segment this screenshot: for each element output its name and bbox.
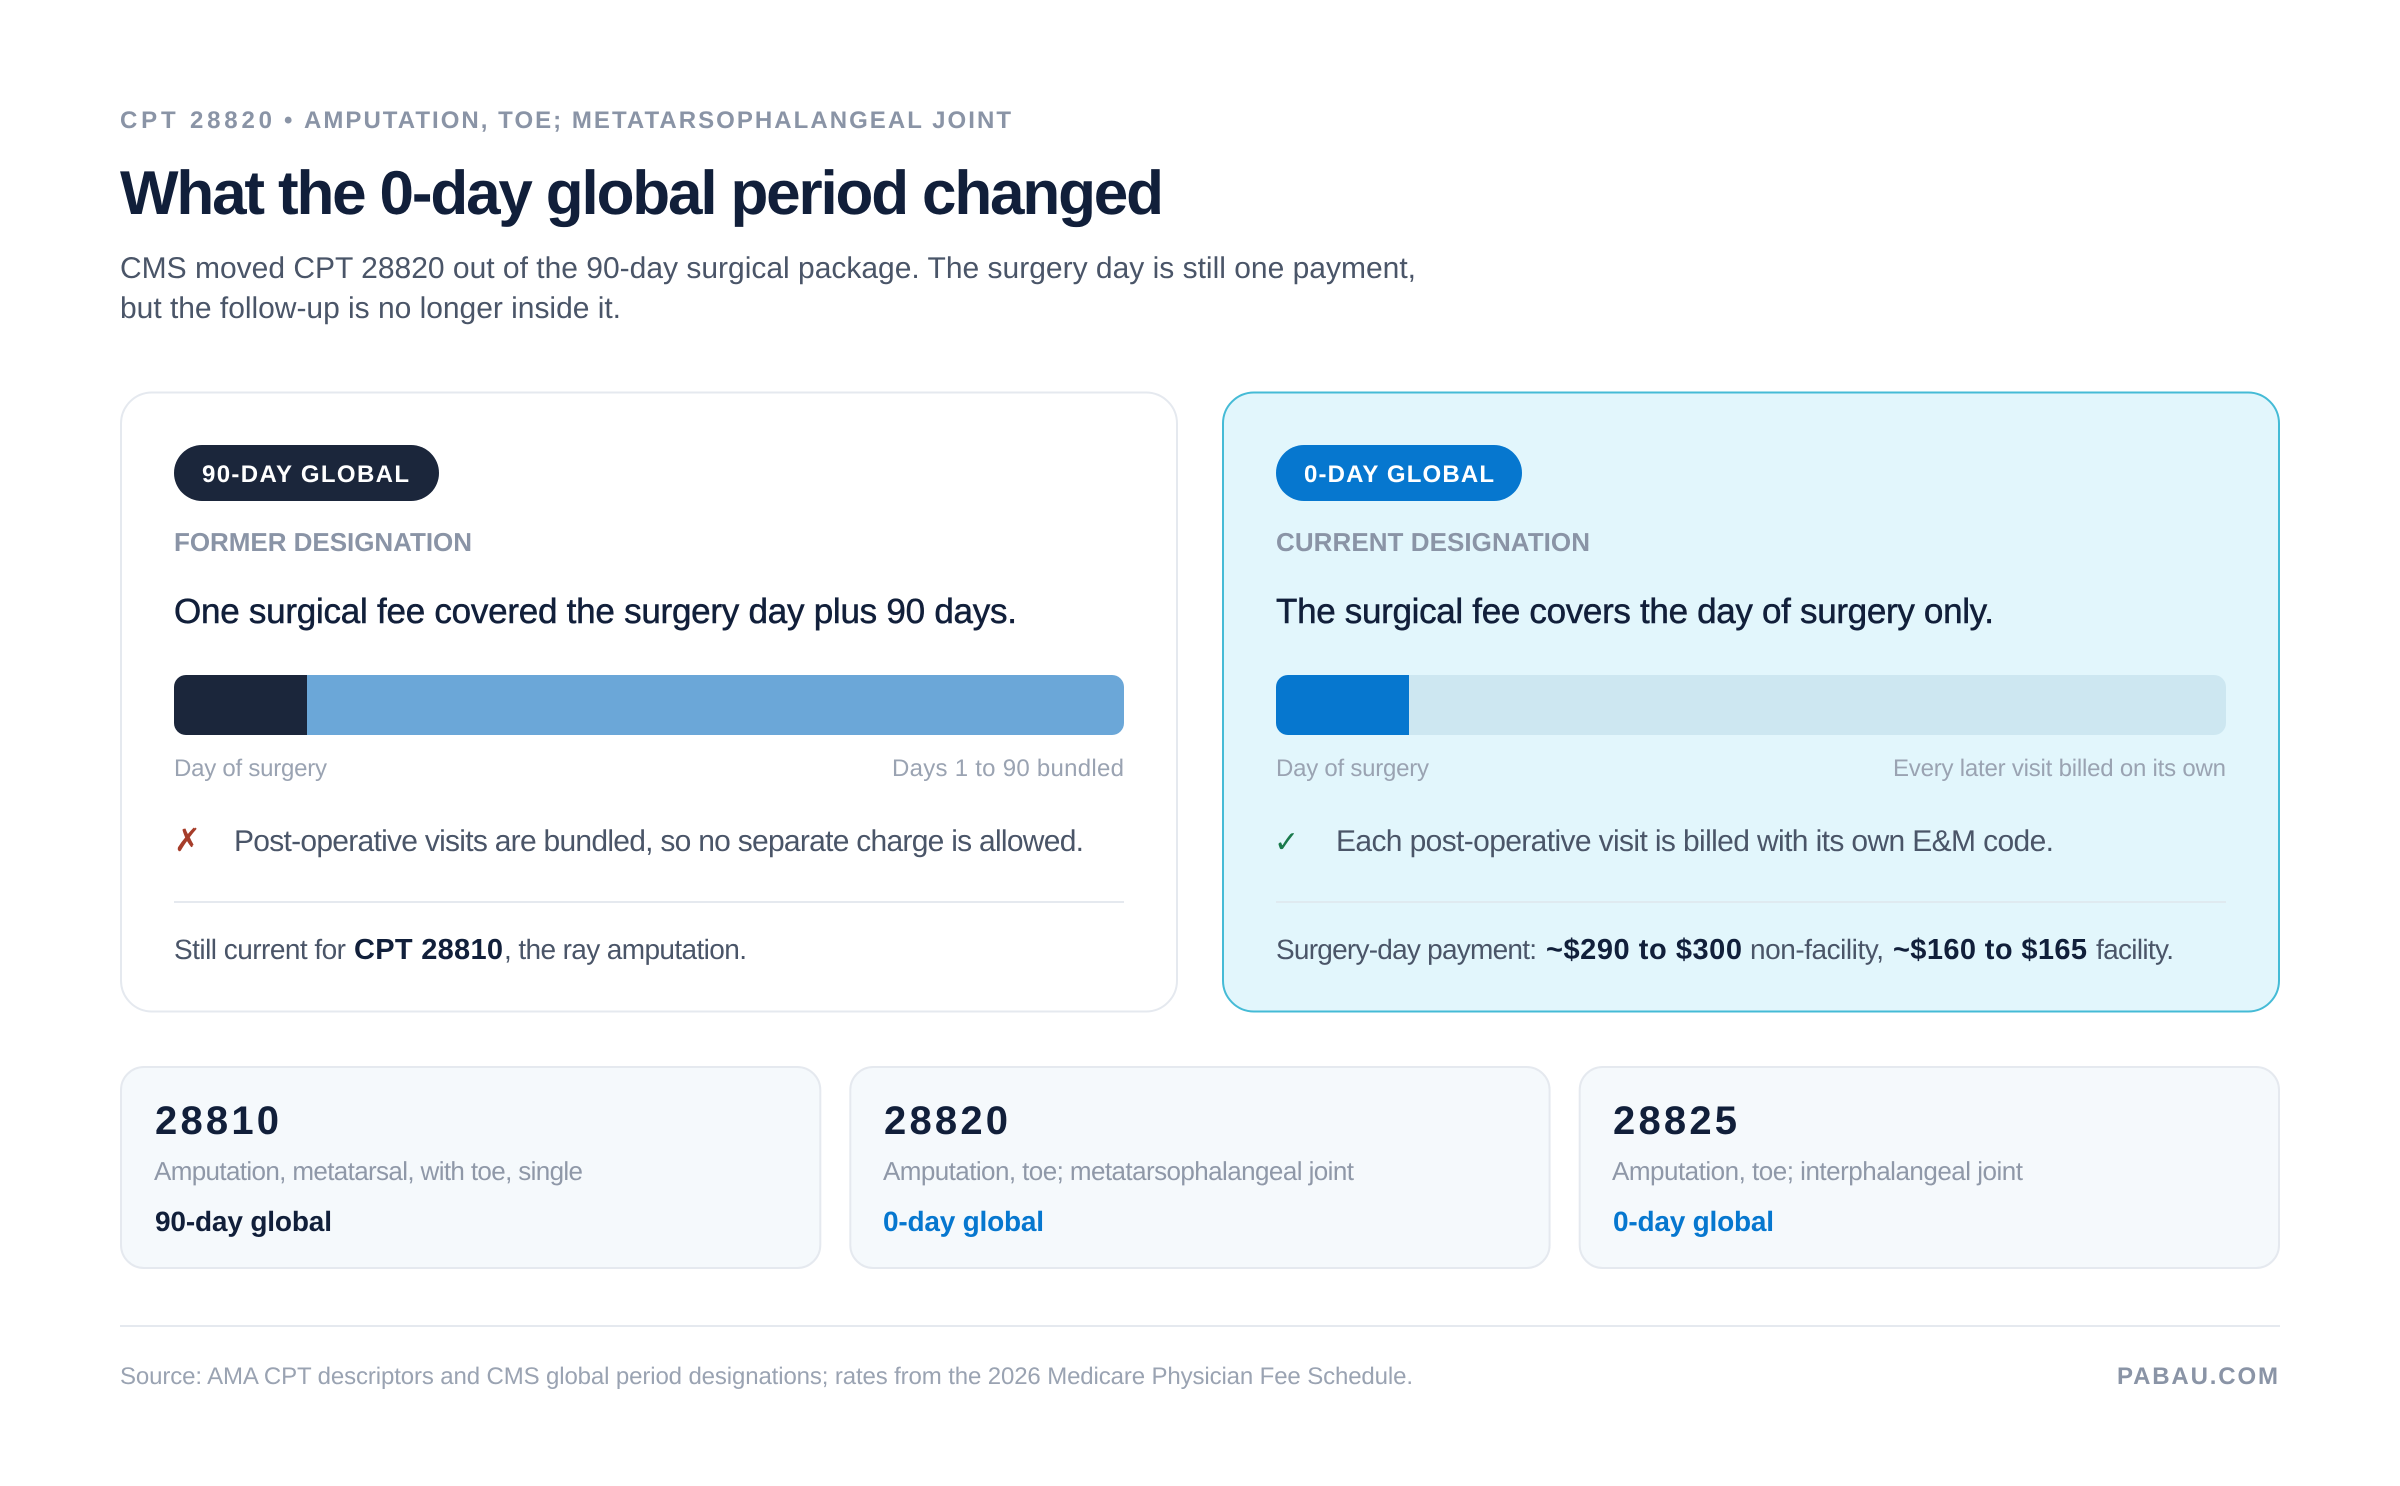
footnote: surgery-day payment: ~$160 to $165 (1893, 934, 2087, 966)
timeline bar: 0-day (1276, 675, 2226, 735)
code card: 28810: 90-day global (155, 1206, 332, 1237)
footnote: surgery-day payment: ~$290 to $300 (1546, 934, 1742, 966)
bar label: every later visit: Every later visit billed on its own (1893, 755, 2226, 782)
code card: 28810: Amputation, metatarsal, with toe, single (154, 1156, 583, 1186)
bar label: day of surgery: Day of surgery (174, 755, 327, 782)
badge: 0-day global (1276, 445, 1522, 501)
code card: 28810: 28810 (155, 1099, 279, 1143)
footnote: surgery-day payment: non-facility, (1750, 934, 1884, 965)
footnote: still current (174, 934, 747, 966)
code card: 28820: 0-day global (883, 1206, 1044, 1237)
text: post-operative billed: Each post-operative visit is billed with its own E&M code. (1336, 825, 2054, 858)
text: post-operative bundled: Post-operative visits are bundled, so no separate charge is allowed. (234, 825, 1084, 858)
code card: 28825: 28825 (1613, 1099, 1737, 1143)
badge: 90-day global: 90-DAY GLOBAL (202, 461, 409, 488)
icon: cross: ✗ (174, 821, 201, 859)
panel: 90-day global former designation (121, 392, 1177, 1012)
badge: 90-day global (174, 445, 439, 501)
badge: 0-day global: 0-DAY GLOBAL (1304, 461, 1494, 488)
eyebrow: CPT 28820 (120, 107, 272, 134)
panel: 0-day global current designation (1223, 392, 2279, 1012)
footnote: surgery-day payment (1276, 934, 2174, 966)
code card: 28820: Amputation, toe; metatarsophalangeal joint (883, 1156, 1355, 1186)
footnote: still current: CPT 28810 (354, 934, 503, 966)
icon: check: ✓ (1274, 825, 1299, 860)
headline: current: The surgical fee covers the day of surgery only. (1276, 592, 1994, 631)
brand: PABAU.COM (2117, 1363, 2278, 1390)
label: former designation: FORMER DESIGNATION (174, 527, 472, 557)
subtitle (120, 252, 1416, 325)
footnote: still current: Still current for (174, 934, 346, 965)
code card: 28825: Amputation, toe; interphalangeal joint (1612, 1156, 2024, 1186)
bar label: day of surgery: Day of surgery (1276, 755, 1429, 782)
bar label: days 1 to 90 bundled: Days 1 to 90 bundled (892, 755, 1124, 782)
footnote: still current: , the ray amputation. (504, 934, 747, 965)
code card: 28825: 0-day global (1613, 1206, 1774, 1237)
headline: former: One surgical fee covered the surgery day plus 90 days. (174, 592, 1017, 631)
subtitle: CMS moved CPT 28820 out of the 90-day surgical package. The surgery day is still one payment, (120, 252, 1416, 285)
eyebrow: AMPUTATION, TOE; METATARSOPHALANGEAL JOINT (304, 107, 1011, 134)
footnote: surgery-day payment: Surgery-day payment: (1276, 934, 1537, 965)
code card: 28820 (850, 1067, 1550, 1268)
code card: 28810 (121, 1067, 820, 1268)
code card: 28825 (1580, 1067, 2279, 1268)
eyebrow: • (284, 107, 292, 134)
title: What the 0-day global period changed (120, 159, 1164, 228)
subtitle: but the follow-up is no longer inside it. (120, 292, 621, 325)
code card: 28820: 28820 (884, 1099, 1008, 1143)
timeline bar: 90-day (174, 675, 1124, 735)
source note: Source: AMA CPT descriptors and CMS global period designations; rates from the 2026 Medicare Physician Fee Schedule. (120, 1363, 1413, 1390)
label: current designation: CURRENT DESIGNATION (1276, 527, 1590, 557)
footnote: surgery-day payment: facility. (2096, 934, 2174, 965)
